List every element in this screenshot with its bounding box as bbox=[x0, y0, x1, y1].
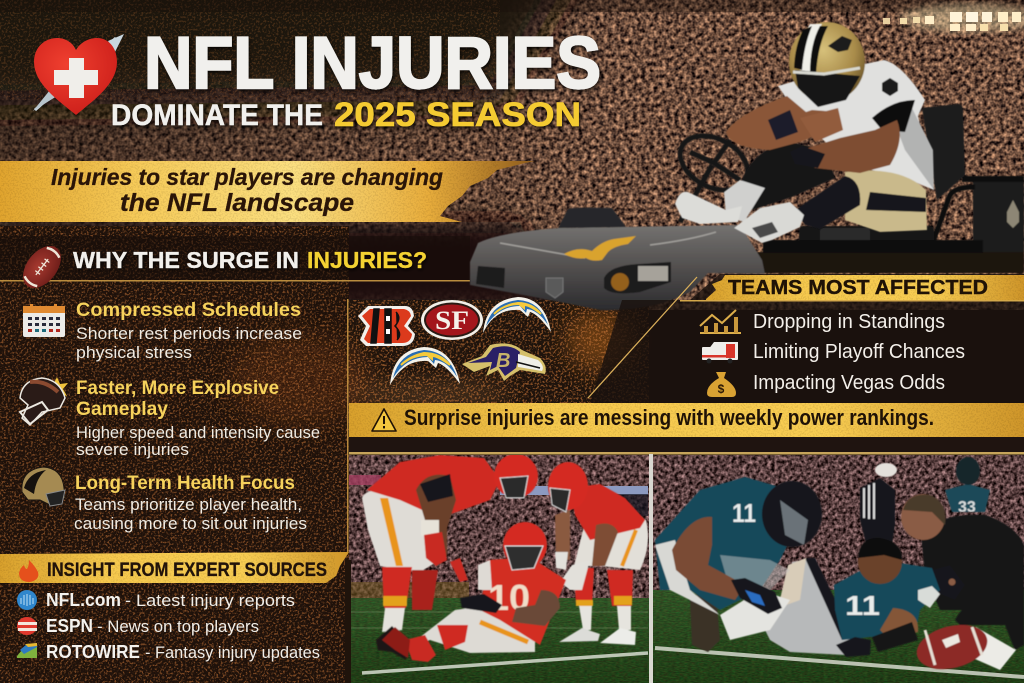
golf cart bbox=[470, 104, 1024, 310]
far player: 33 bbox=[958, 499, 976, 516]
reason: long-term health: Teams prioritize player health, bbox=[75, 495, 302, 514]
logo: 49ers: SF bbox=[435, 306, 469, 335]
callout banner: surprise injuries: Surprise injuries are messing with weekly power rankings. bbox=[404, 405, 934, 430]
icon: helmet with burst bbox=[20, 377, 68, 425]
source: nfl.com: NFL.com bbox=[46, 590, 121, 610]
logo: bengals bbox=[358, 306, 415, 346]
gold frame lines bbox=[347, 299, 1024, 553]
reason: compressed schedules bbox=[23, 299, 302, 362]
title: DOMINATE THE bbox=[111, 99, 323, 132]
player: seated number 10 bbox=[382, 522, 566, 662]
injured player bbox=[690, 538, 940, 657]
trainer bbox=[901, 494, 1024, 650]
source: nfl.com bbox=[17, 590, 295, 610]
football and towel bbox=[916, 624, 1017, 670]
referee bbox=[860, 463, 897, 545]
stadium lights bbox=[883, 4, 1024, 32]
source: rotowire: - Fantasy injury updates bbox=[145, 643, 320, 662]
kneeling player bbox=[655, 477, 822, 615]
icon: money bag bbox=[707, 372, 736, 397]
photo: eagles players with trainer bbox=[653, 455, 1024, 683]
source: espn bbox=[17, 616, 259, 636]
black sleeve bbox=[872, 100, 915, 132]
reason: long-term health bbox=[22, 467, 307, 533]
reason: long-term health: causing more to sit out injuries bbox=[74, 514, 307, 533]
source: espn: ESPN bbox=[46, 616, 93, 636]
left panel photo edge bbox=[345, 560, 351, 683]
section heading: why the surge bbox=[0, 236, 470, 295]
dark lower background with grain bbox=[0, 226, 649, 683]
jersey emblem bbox=[882, 78, 898, 96]
team logos bbox=[358, 297, 551, 385]
player on cart bbox=[675, 22, 934, 243]
icon: money bag: $ bbox=[718, 382, 725, 396]
icon: flame bbox=[19, 560, 38, 582]
text: limiting playoff chances: Limiting Playoff Chances bbox=[753, 341, 965, 363]
reason: compressed schedules: physical stress bbox=[76, 343, 192, 362]
reason: faster gameplay bbox=[20, 377, 320, 459]
dark strip above photos bbox=[349, 437, 1024, 452]
icon: black and gold helmet bbox=[22, 467, 65, 506]
logo: ravens: B bbox=[496, 350, 510, 372]
player: standing left bbox=[362, 454, 538, 660]
seat bbox=[763, 104, 983, 253]
jersey bbox=[778, 60, 934, 190]
icon: football bbox=[15, 239, 69, 295]
reason: compressed schedules: Compressed Schedules bbox=[76, 299, 301, 321]
icon: calendar bbox=[23, 304, 65, 337]
subtitle banner bbox=[0, 161, 535, 223]
reason: faster gameplay: severe injuries bbox=[76, 440, 189, 459]
section heading: why the surge: INJURIES? bbox=[307, 247, 427, 273]
steering wheel bbox=[671, 125, 757, 222]
background: stadium crowd bbox=[0, 0, 1024, 310]
source: nfl.com: - Latest injury reports bbox=[125, 591, 295, 610]
logo: chargers bolt top bbox=[483, 297, 551, 333]
logo: chargers bolt bottom bbox=[390, 347, 460, 385]
title bbox=[111, 23, 601, 134]
reason: faster gameplay: Gameplay bbox=[76, 398, 168, 420]
heading banner bbox=[680, 275, 1024, 302]
source: espn: - News on top players bbox=[97, 617, 259, 636]
source: rotowire bbox=[17, 642, 320, 662]
player: seated number 10: 10 bbox=[488, 577, 530, 618]
title: 2025 SEASON bbox=[334, 96, 581, 134]
helmet bbox=[789, 22, 865, 107]
source list bbox=[17, 590, 320, 662]
cart hood bbox=[470, 208, 765, 310]
icon: ambulance bbox=[702, 342, 738, 364]
reason: long-term health: Long-Term Health Focus bbox=[75, 472, 295, 494]
photo divider bbox=[649, 454, 653, 683]
title: NFL INJURIES bbox=[144, 23, 601, 104]
panel: teams most affected bbox=[588, 274, 1024, 404]
heading banner: TEAMS MOST AFFECTED bbox=[728, 277, 988, 299]
section heading: why the surge: WHY THE SURGE IN bbox=[73, 247, 299, 273]
text: impacting vegas odds: Impacting Vegas Odds bbox=[753, 372, 945, 394]
cart floor band bbox=[740, 252, 1024, 273]
callout banner: surprise injuries bbox=[349, 403, 1024, 437]
insight banner bbox=[0, 552, 349, 583]
reason: faster gameplay: Faster, More Explosive bbox=[76, 377, 279, 399]
icon: rising chart bbox=[700, 310, 741, 333]
far player bbox=[945, 457, 990, 516]
insight banner: INSIGHT FROM EXPERT SOURCES bbox=[47, 560, 327, 581]
panel: why the surge reasons bbox=[20, 299, 320, 533]
arms bbox=[726, 96, 840, 150]
logo: 49ers bbox=[421, 300, 483, 340]
cart rear cargo box bbox=[930, 176, 1024, 252]
injured player: 11 bbox=[845, 590, 880, 621]
icon: heart with cross and arrow bbox=[33, 34, 124, 115]
reason: compressed schedules: Shorter rest periods increase bbox=[76, 324, 302, 343]
text: dropping in standings: Dropping in Standings bbox=[753, 311, 945, 333]
subtitle banner: Injuries to star players are changing bbox=[51, 164, 443, 190]
kneeling player: 11 bbox=[732, 498, 756, 528]
photo: chiefs players with injured teammate bbox=[349, 454, 649, 683]
player: standing right bbox=[548, 462, 648, 645]
legs and pants bbox=[845, 170, 927, 232]
reason: faster gameplay: Higher speed and intensity cause bbox=[76, 423, 320, 442]
source: rotowire: ROTOWIRE bbox=[46, 642, 140, 662]
logo: ravens bbox=[462, 343, 546, 381]
subtitle banner: the NFL landscape bbox=[120, 189, 354, 217]
icon: warning triangle bbox=[372, 409, 396, 431]
